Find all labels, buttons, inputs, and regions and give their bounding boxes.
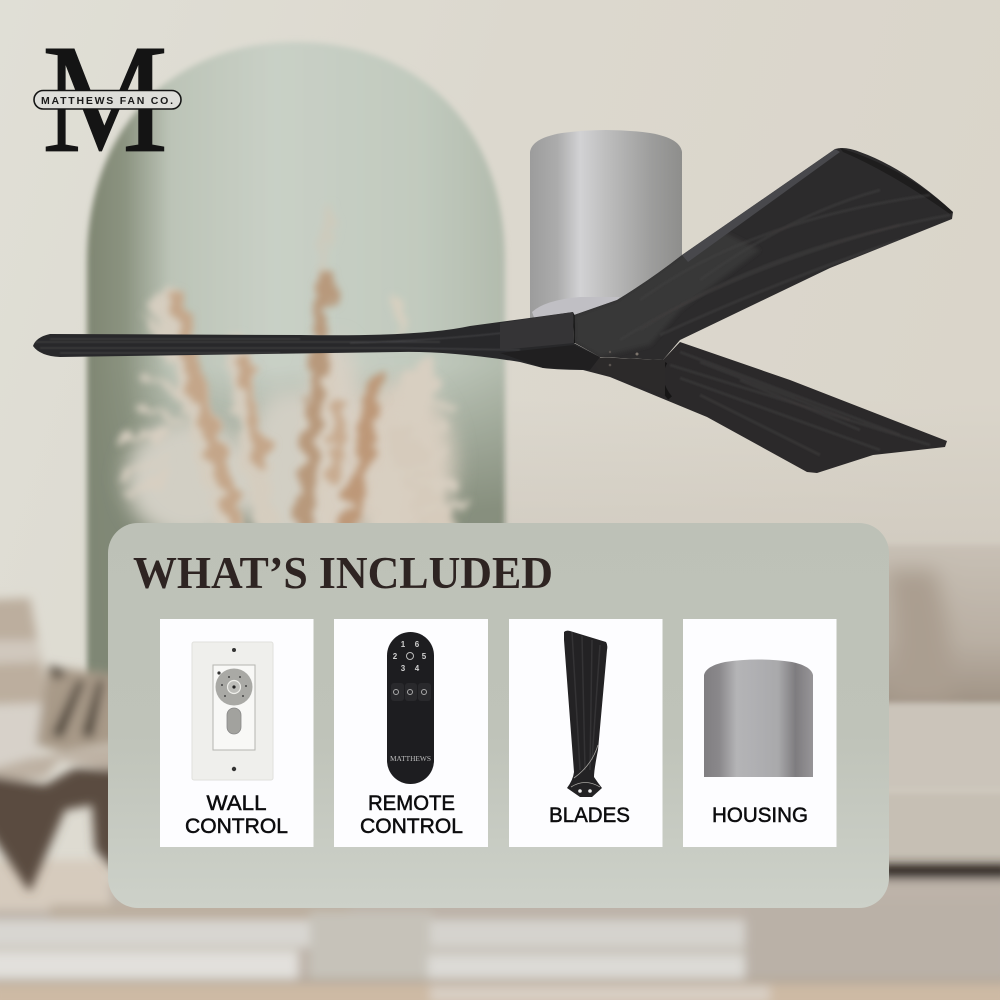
label: WALL [206,792,266,815]
icon: remote control: MATTHEWS [390,755,431,763]
left blade [33,312,600,370]
card: remote control [334,619,488,847]
card: wall control [160,619,314,847]
icon: remote control: 1 [401,640,406,649]
green arched niche [87,42,505,690]
label: CONTROL [360,815,463,838]
logo name pill: MATTHEWS FAN CO. [41,95,173,107]
right sofa [700,545,1000,861]
icon: remote control [387,632,434,784]
central hub [573,312,638,366]
left sofa and throw [0,598,120,892]
icon: remote control: 2 [393,652,398,661]
label [360,792,463,838]
card: blades [509,619,662,847]
icon: wall control [192,642,273,780]
ceiling fan [30,130,960,480]
logo: Matthews Fan Co. [34,12,181,185]
label: CONTROL [185,815,288,838]
label: REMOTE [368,792,455,815]
logo name pill [34,90,181,109]
icon: remote control: 6 [415,640,420,649]
icon: housing [704,660,813,777]
icon: remote control: 3 [401,664,406,673]
heading: WHAT’S INCLUDED [133,547,553,598]
card: housing [683,619,836,847]
monogram M: M [42,12,168,185]
pampas grass [122,210,468,560]
label [185,792,288,838]
icon: blade [564,630,608,797]
upper right blade [574,148,953,360]
fan housing [530,130,682,322]
panel: what's included [108,523,889,908]
icon: remote control: 5 [422,652,427,661]
lower right blade [583,342,947,473]
floor [0,860,1000,1000]
label: BLADES [549,804,630,827]
label: HOUSING [712,804,808,827]
icon: remote control: 4 [415,664,420,673]
